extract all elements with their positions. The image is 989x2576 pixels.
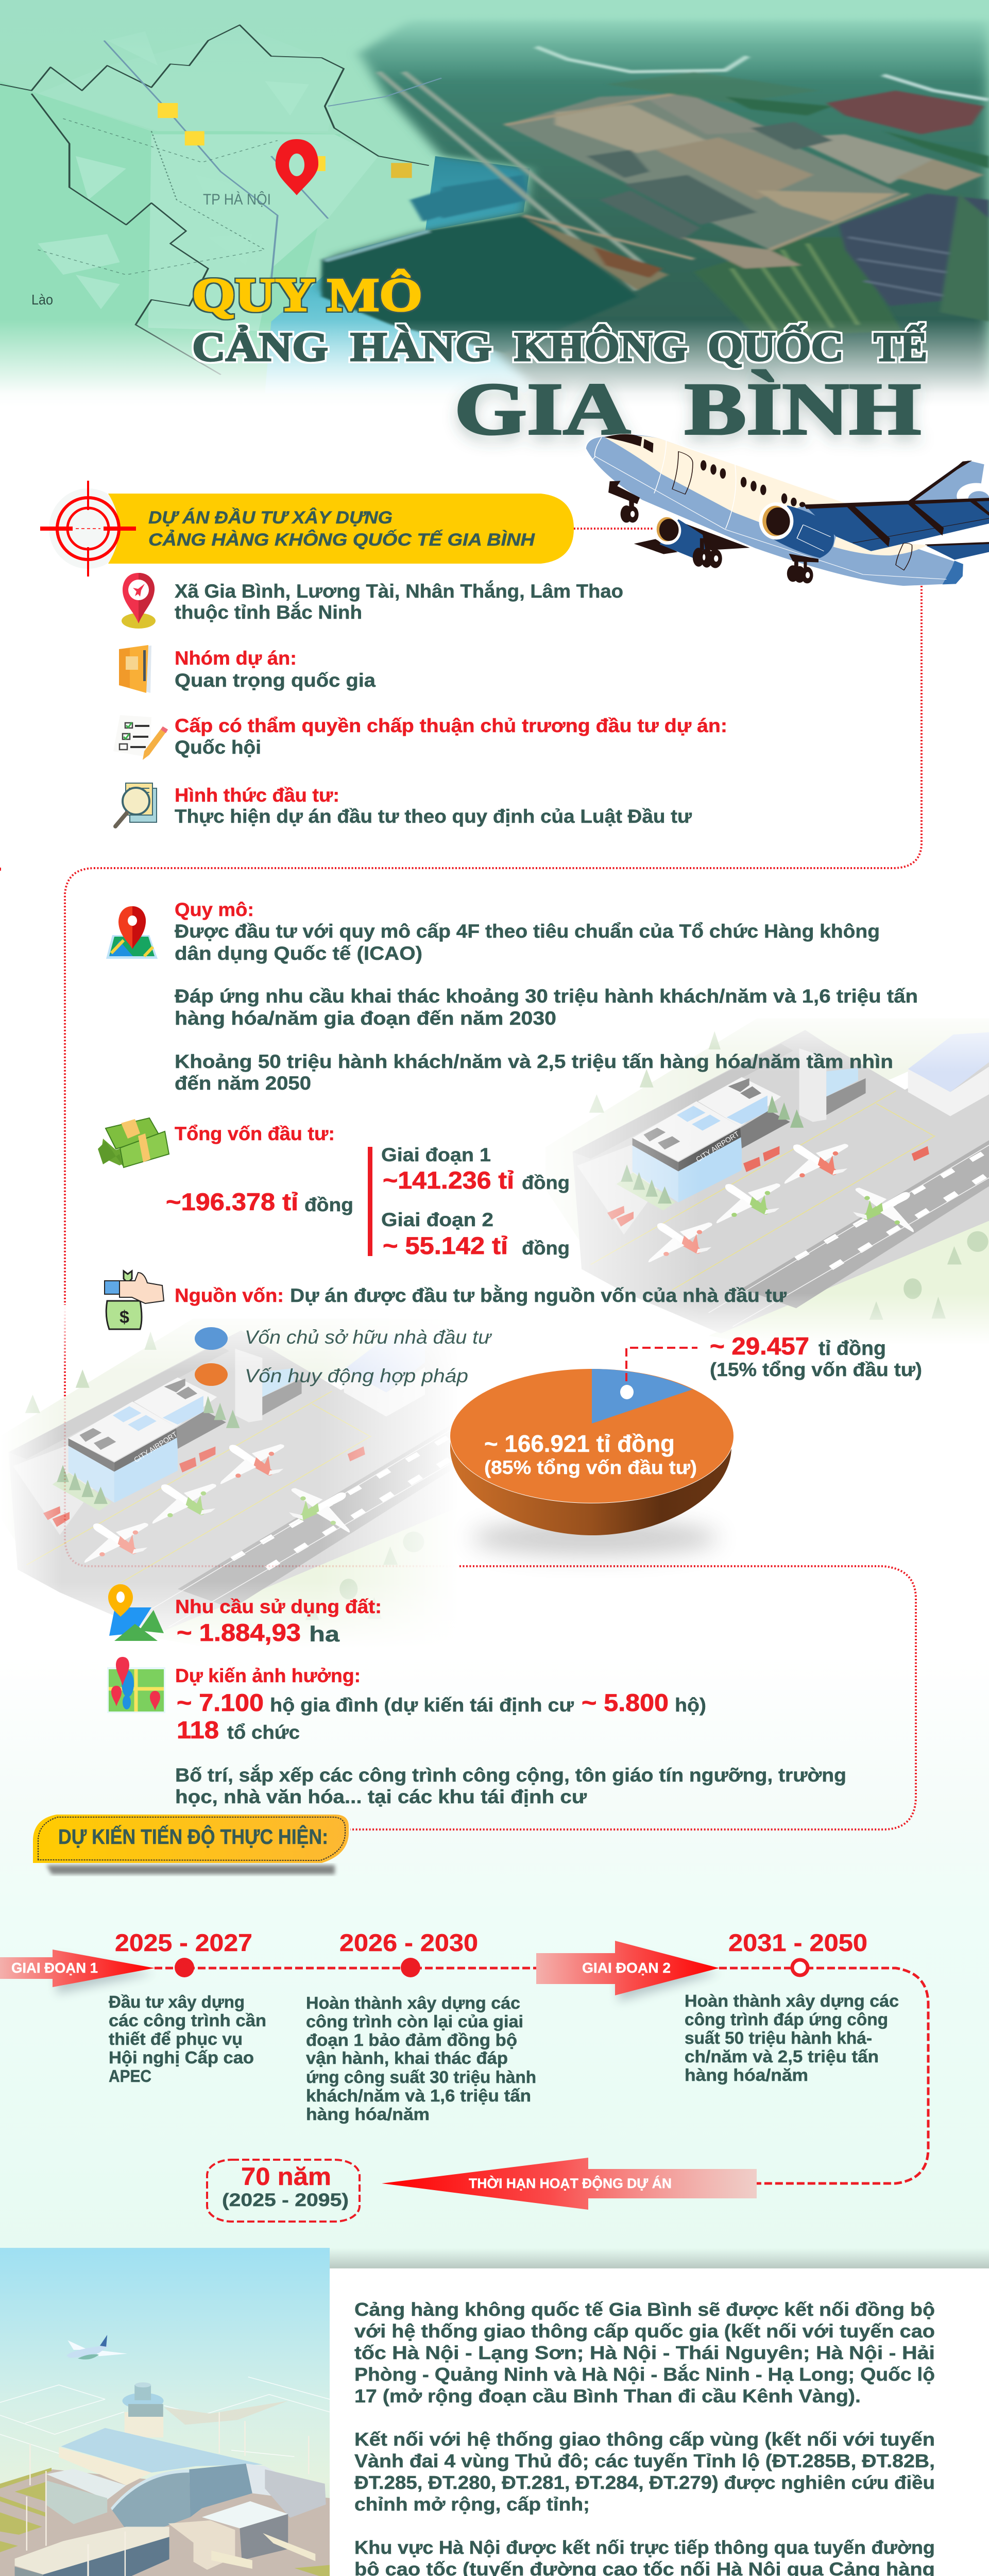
- icon: land use map: [108, 1584, 164, 1641]
- capital source text: Dự án được đầu tư bằng nguồn vốn của nhà đầu tư: [290, 1284, 787, 1306]
- project group text: Nhóm dự án:: [175, 648, 297, 669]
- arrow: phase 1: [0, 1950, 155, 1994]
- icon: red location pin: [276, 139, 318, 195]
- connectivity paragraph 2: chỉnh mở rộng, cấp tỉnh;: [354, 2494, 590, 2515]
- phase 2 value: đồng: [522, 1238, 570, 1259]
- impact text: hộ gia đình (dự kiến tái định cư: [270, 1694, 574, 1716]
- heading: project banner with target: [40, 481, 574, 577]
- pie label: investor equity: tỉ đồng: [819, 1337, 886, 1360]
- milestone 2031-2050: hàng hóa/năm: [685, 2065, 808, 2084]
- title line 2: QUỐC: [708, 324, 844, 370]
- investment form text: Hình thức đầu tư:: [175, 785, 339, 806]
- milestone 2026-2030: ứng công suất 30 triệu hành: [306, 2067, 536, 2087]
- location text: thuộc tỉnh Bắc Ninh: [175, 601, 362, 623]
- schedule badge: DỰ KIẾN TIẾN ĐỘ THỰC HIỆN:: [58, 1825, 328, 1849]
- pie label: mobilised capital: ~ 166.921 tỉ đồng: [484, 1430, 675, 1457]
- phase divider: [368, 1147, 372, 1256]
- icon: target rings: [40, 481, 136, 577]
- impact text: Dự kiến ảnh hưởng:: [175, 1665, 361, 1686]
- milestone 2031-2050: [685, 1929, 899, 2084]
- project group text: [175, 648, 376, 691]
- icon: affected area map: [107, 1657, 165, 1713]
- map label: TP Hà Nội: TP HÀ NỘI: [203, 191, 271, 208]
- phase 2 value: Giai đoạn 2: [381, 1209, 493, 1230]
- milestone 2025-2027: APEC: [109, 2066, 151, 2086]
- connectivity paragraph 2: ĐT.285, ĐT.280, ĐT.281, ĐT.284, ĐT.279) được nghiên cứu điều: [354, 2472, 935, 2493]
- milestone 2026-2030: hàng hóa/năm: [306, 2105, 430, 2124]
- milestone 2026-2030: vận hành, khai thác đáp: [306, 2048, 508, 2067]
- phase 1 value: đồng: [522, 1172, 570, 1193]
- phase 1 value: [381, 1144, 570, 1194]
- icon: pin on map: [106, 906, 158, 959]
- milestone 2026-2030: [306, 1929, 536, 2124]
- land use text: ~ 1.884,93: [177, 1619, 301, 1646]
- total investment heading: Tổng vốn đầu tư:: [175, 1123, 335, 1144]
- pie label: investor equity: ~ 29.457: [710, 1332, 809, 1360]
- legend: investor equity: Vốn chủ sở hữu nhà đầu tư: [245, 1327, 492, 1348]
- title line 1: QUY MÔ: [192, 268, 422, 321]
- phase 2 value: [381, 1209, 570, 1259]
- scale text: Đáp ứng nhu cầu khai thác khoảng 30 triệu hành khách/năm và 1,6 triệu tấn: [175, 986, 918, 1007]
- scale text: Khoảng 50 triệu hành khách/năm và 2,5 triệu tấn hàng hóa/năm tầm nhìn: [175, 1051, 893, 1072]
- icon: money stacks: [98, 1118, 169, 1167]
- illustration: airplane: [586, 434, 989, 586]
- illustration: faded airport lower left: CITY AIRPORT: [132, 1430, 179, 1464]
- callout: 70 years: [207, 2160, 360, 2222]
- milestone 2031-2050: ch/năm và 2,5 triệu tấn: [685, 2047, 879, 2066]
- schedule badge: [33, 1815, 349, 1874]
- illustration: faded airport top right: [545, 991, 989, 1350]
- scale text: dân dụng Quốc tế (ICAO): [175, 943, 422, 964]
- heading: project banner with target: CẢNG HÀNG KHÔNG QUỐC TẾ GIA BÌNH: [148, 530, 536, 550]
- connectivity paragraph 1: [354, 2299, 935, 2406]
- location text: Xã Gia Bình, Lương Tài, Nhân Thắng, Lâm Thao: [175, 580, 623, 602]
- banner text: DỰ ÁN ĐẦU TƯ XÂY DỰNG: [148, 508, 393, 528]
- title: [192, 268, 927, 450]
- illustration: faded airport lower left: [11, 1330, 451, 1632]
- pie label: mobilised capital: [484, 1430, 697, 1478]
- impact text: tổ chức: [227, 1722, 300, 1743]
- arrow: phase 2: GIAI ĐOẠN 2: [582, 1960, 671, 1976]
- milestone 2026-2030: đoạn 1 bảo đảm đồng bộ: [306, 2030, 517, 2049]
- timeline: [0, 1929, 928, 2222]
- icon: hand with money bag: $: [120, 1308, 129, 1327]
- milestone 2025-2027: thiết để phục vụ: [109, 2029, 243, 2048]
- title line 3: [454, 368, 921, 450]
- phase 1 value: Giai đoạn 1: [381, 1144, 491, 1165]
- scale text: đến năm 2050: [175, 1073, 311, 1094]
- total investment value: ~196.378 tỉ: [166, 1188, 298, 1215]
- milestone 2026-2030: khách/năm và 1,6 triệu tấn: [306, 2086, 531, 2105]
- land use text: Nhu cầu sử dụng đất:: [175, 1596, 382, 1617]
- panel: connectivity text: [330, 2268, 989, 2576]
- project group text: Quan trọng quốc gia: [175, 670, 376, 691]
- arrow: phase 1: GIAI ĐOẠN 1: [11, 1960, 98, 1976]
- impact text: ~ 7.100: [177, 1689, 264, 1716]
- title line 2: HÀNG: [350, 325, 492, 370]
- scale text: Quy mô:: [175, 899, 254, 920]
- milestone 2025-2027: 2025 - 2027: [115, 1929, 252, 1956]
- connectivity paragraph 1: với hệ thống giao thông cấp quốc gia (kết nối với tuyến cao: [354, 2320, 935, 2342]
- impact text: [175, 1665, 846, 1807]
- connectivity paragraph 1: Cảng hàng không quốc tế Gia Bình sẽ được kết nối đồng bộ: [354, 2299, 935, 2320]
- land use text: [175, 1596, 382, 1646]
- milestone 2031-2050: suất 50 triệu hành khá-: [685, 2028, 872, 2047]
- authority text: [175, 715, 727, 758]
- connectivity paragraph 2: Kết nối với hệ thống giao thông cấp vùng (kết nối với tuyến: [354, 2429, 935, 2450]
- icon: hand with money bag: [105, 1271, 164, 1329]
- title line 2: KHÔNG: [514, 325, 688, 370]
- chart: 3D pie: [450, 1348, 734, 1556]
- connectivity paragraph 3: Khu vực Hà Nội được kết nối trực tiếp thông qua tuyến đường: [354, 2537, 935, 2558]
- connectivity paragraph 3: [354, 2537, 935, 2576]
- connectivity paragraph 1: Phòng - Quảng Ninh và Hà Nội - Bắc Ninh - Hạ Long; Quốc lộ: [354, 2363, 935, 2385]
- milestone 2026-2030: Hoàn thành xây dựng các: [306, 1993, 520, 2012]
- title line 3: GIA: [454, 368, 630, 450]
- icon: mini plane in sky: [66, 2335, 127, 2360]
- land use text: ha: [309, 1622, 340, 1646]
- scale text: hàng hóa/năm gia đoạn đến năm 2030: [175, 1008, 556, 1029]
- panel shadows: [330, 2248, 989, 2268]
- impact text: ~ 5.800: [582, 1689, 669, 1716]
- location text: [175, 580, 623, 623]
- milestone 2025-2027: các công trình cần: [109, 2011, 266, 2030]
- capital source text: Nguồn vốn:: [175, 1285, 284, 1306]
- milestone 2031-2050: công trình đáp ứng công: [685, 2010, 888, 2029]
- impact text: Bố trí, sắp xếp các công trình công cộng, tôn giáo tín ngưỡng, trường: [175, 1764, 846, 1786]
- milestone 2025-2027: Đầu tư xây dựng: [109, 1992, 245, 2011]
- timeline dashed path: [155, 1968, 928, 2183]
- legend: [195, 1327, 492, 1386]
- milestone 2025-2027: [109, 1929, 266, 2086]
- illustration: airport terminal: [0, 2248, 330, 2576]
- impact text: hộ): [675, 1694, 706, 1716]
- illustration: faded airport top right: CITY AIRPORT: [694, 1129, 741, 1164]
- yellow banner: [108, 494, 574, 564]
- title line 2: [192, 324, 927, 370]
- connectivity paragraph 1: tốc Hà Nội - Lạng Sơn; Hà Nội - Thái Nguyên; Hà Nội - Hải: [354, 2342, 935, 2363]
- milestone 2026-2030: công trình còn lại của giai: [306, 2012, 523, 2031]
- connectivity paragraph 1: 17 (mở rộng đoạn cầu Bình Than đi cầu Kênh Vàng).: [354, 2385, 861, 2406]
- connectivity paragraph 2: [354, 2429, 935, 2515]
- pie label: investor equity: (15% tổng vốn đầu tư): [710, 1359, 922, 1380]
- investment form text: Thực hiện dự án đầu tư theo quy định của Luật Đầu tư: [175, 806, 692, 827]
- total investment value: đồng: [304, 1194, 353, 1215]
- impact text: học, nhà văn hóa... tại các khu tái định cư: [175, 1786, 587, 1807]
- investment form text: [175, 785, 692, 827]
- connectivity paragraph 2: Vành đai 4 vùng Thủ đô; các tuyến Tỉnh lộ (ĐT.285B, ĐT.82B,: [354, 2450, 935, 2471]
- pie label: investor equity: [710, 1332, 922, 1380]
- milestone 2031-2050: 2031 - 2050: [728, 1929, 867, 1956]
- arrow: phase 2: [536, 1941, 719, 2002]
- phase 2 value: ~ 55.142 tỉ: [383, 1232, 508, 1259]
- icon: checklist: [113, 715, 168, 760]
- authority text: Cấp có thẩm quyền chấp thuận chủ trương đầu tư dự án:: [175, 715, 727, 736]
- scale text: [175, 899, 918, 1094]
- title line 2: CẢNG: [192, 325, 328, 370]
- pie label: mobilised capital: (85% tổng vốn đầu tư): [484, 1457, 697, 1478]
- arrow: operating period: [382, 2158, 757, 2210]
- dotted outline frame: [65, 586, 922, 1829]
- hero: map and aerial photo: [0, 0, 989, 406]
- total investment value: [166, 1188, 353, 1215]
- authority text: Quốc hội: [175, 737, 261, 758]
- milestone 2031-2050: Hoàn thành xây dựng các: [685, 1991, 899, 2010]
- legend: mobilised capital: Vốn huy động hợp pháp: [245, 1365, 468, 1386]
- title line 2: TẾ: [874, 324, 927, 370]
- title line 3: BÌNH: [685, 368, 921, 450]
- arrow: operating period: THỜI HẠN HOẠT ĐỘNG DỰ ÁN: [469, 2175, 672, 2191]
- map label: Lào: Lào: [31, 292, 53, 308]
- icon: document with magnifier: [115, 783, 157, 826]
- phase 1 value: ~141.236 tỉ: [383, 1166, 514, 1194]
- scale text: Được đầu tư với quy mô cấp 4F theo tiêu chuẩn của Tổ chức Hàng không: [175, 921, 880, 942]
- callout: 70 years: (2025 - 2095): [222, 2190, 349, 2210]
- icon: folder: [119, 645, 151, 693]
- icon: target background: [49, 488, 127, 569]
- milestone 2026-2030: 2026 - 2030: [339, 1929, 478, 1956]
- milestone 2025-2027: Hội nghị Cấp cao: [109, 2048, 254, 2067]
- impact text: 118: [177, 1716, 219, 1743]
- legend: mobilised capital: [195, 1363, 468, 1386]
- icon: airport location pin: [122, 573, 156, 629]
- callout: 70 years: 70 năm: [241, 2163, 331, 2191]
